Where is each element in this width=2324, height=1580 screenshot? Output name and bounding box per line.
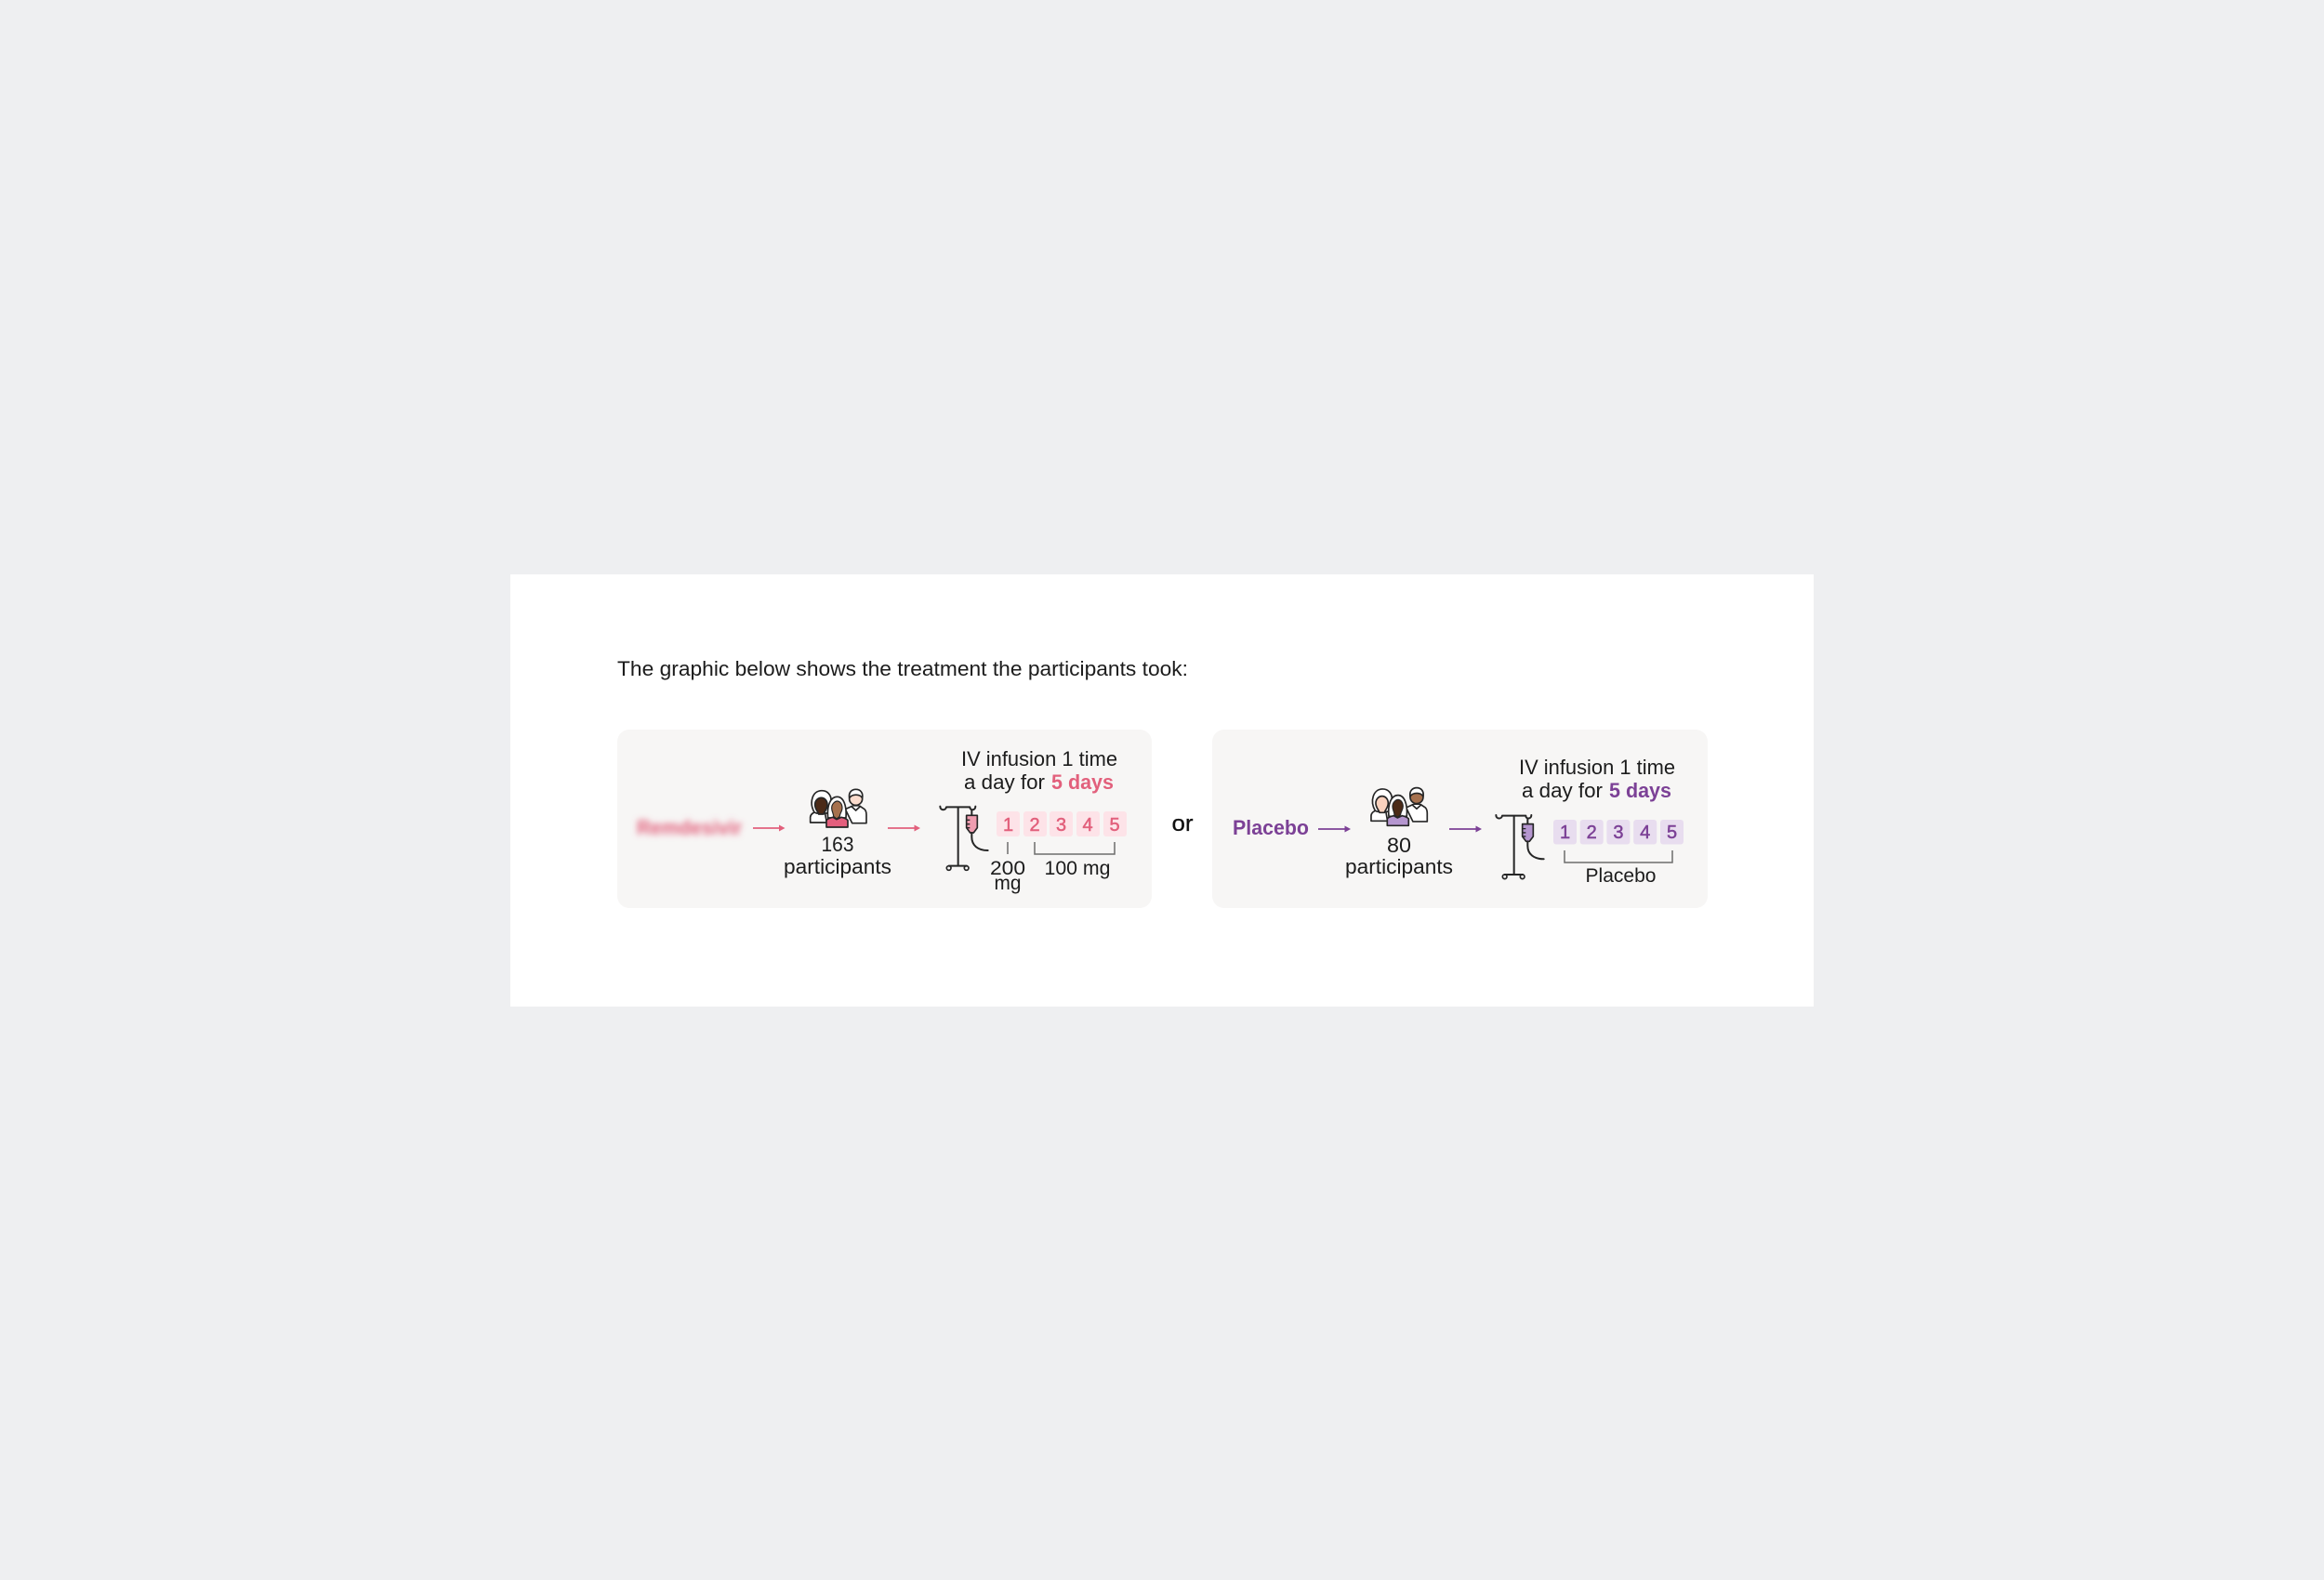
dose bracket: days 2 to 5 xyxy=(1035,842,1115,879)
arrow to infusion xyxy=(1449,825,1482,833)
participant count: 163 xyxy=(822,833,853,856)
arrow to participants xyxy=(753,825,785,831)
arrow to participants xyxy=(1318,825,1351,833)
day boxes: 2 xyxy=(1587,823,1597,843)
white card xyxy=(510,574,1814,1007)
infusion schedule heading: IV infusion 1 time xyxy=(1519,756,1675,779)
infusion schedule heading: IV infusion 1 time xyxy=(961,747,1117,770)
or: or xyxy=(1171,811,1194,836)
label: remdesivir (blurred): Remdesivir xyxy=(637,816,742,839)
participant count xyxy=(784,833,891,878)
participant count: participants xyxy=(784,855,891,878)
day boxes: 5 xyxy=(1667,823,1677,843)
day boxes xyxy=(1553,820,1684,844)
day boxes: 4 xyxy=(1640,823,1650,843)
day boxes: 1 xyxy=(1560,823,1570,843)
dose bracket: days 2 to 5: 100 mg xyxy=(1045,858,1110,879)
icon: three participants xyxy=(1371,788,1427,825)
arrow to infusion xyxy=(888,825,920,831)
infusion schedule heading: 5 days xyxy=(1609,779,1671,802)
placebo bracket: Placebo xyxy=(1586,865,1657,887)
infusion schedule heading xyxy=(961,747,1117,794)
icon: iv drip xyxy=(1496,815,1544,879)
participant count: participants xyxy=(1345,855,1453,878)
day boxes: 3 xyxy=(1613,823,1623,843)
day boxes: 3 xyxy=(1056,815,1066,836)
day boxes: 5 xyxy=(1109,815,1120,836)
icon: three participants xyxy=(811,789,866,827)
day boxes: 1 xyxy=(1003,815,1013,836)
dose bracket: day 1 xyxy=(990,842,1025,894)
panel: remdesivir xyxy=(617,730,1152,908)
dose bracket: day 1: mg xyxy=(995,873,1021,894)
placebo bracket xyxy=(1565,850,1672,887)
day boxes: 2 xyxy=(1029,815,1040,836)
dose bracket: day 1: 200 xyxy=(990,858,1025,879)
participant count xyxy=(1345,834,1453,878)
intro sentence: The graphic below shows the treatment the participants took: xyxy=(617,657,1188,680)
icon: iv drip xyxy=(940,807,988,870)
day boxes: 4 xyxy=(1082,815,1093,836)
infusion schedule heading: a day for xyxy=(1522,779,1603,802)
infusion schedule heading: a day for xyxy=(964,770,1045,794)
infusion schedule heading: 5 days xyxy=(1051,770,1114,794)
label: placebo: Placebo xyxy=(1233,816,1309,839)
participant count: 80 xyxy=(1387,834,1411,857)
panel: placebo xyxy=(1212,730,1708,908)
day boxes xyxy=(997,811,1127,836)
infusion schedule heading xyxy=(1519,756,1675,802)
